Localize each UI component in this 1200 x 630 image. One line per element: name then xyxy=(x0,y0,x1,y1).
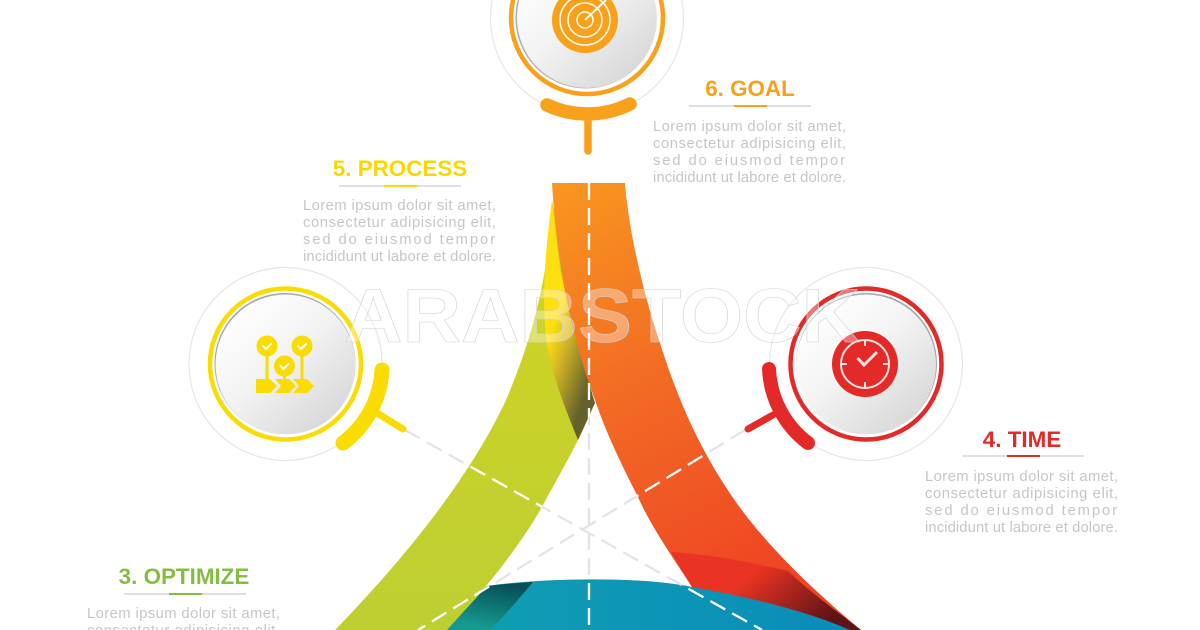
icon: clock xyxy=(832,331,898,397)
body text: process: Lorem ipsum dolor sit amet, xyxy=(303,198,496,214)
text block: 4. time xyxy=(925,427,1118,534)
text block: 6. goal xyxy=(653,76,846,183)
body text: goal: sed do eiusmod tempor xyxy=(653,153,845,169)
icon: target xyxy=(552,0,618,53)
ribbon: orange band xyxy=(552,183,861,630)
ribbon: green band xyxy=(335,200,595,630)
ribbon: teal band xyxy=(447,579,850,630)
text block: 5. process xyxy=(303,156,496,263)
node: process xyxy=(189,268,403,460)
text block: 3. optimize xyxy=(87,564,280,630)
node: time xyxy=(748,268,962,460)
body text: time xyxy=(925,469,1118,534)
body text: goal: consectetur adipisicing elit, xyxy=(653,136,846,152)
pointer: process xyxy=(343,370,403,443)
watermark: ARABSTOCK xyxy=(344,274,860,359)
body text: optimize xyxy=(87,606,280,630)
heading: 3. optimize: 3. OPTIMIZE xyxy=(119,564,249,589)
divider: optimize xyxy=(124,593,246,595)
body text: process xyxy=(303,198,496,263)
dashed guide lines xyxy=(405,183,762,630)
heading: 6. goal: 6. GOAL xyxy=(705,76,795,101)
node: goal xyxy=(490,0,684,151)
heading: 4. time: 4. TIME xyxy=(983,427,1061,452)
divider: goal xyxy=(689,105,811,107)
ribbon fold: red to maroon xyxy=(671,552,861,630)
pointer: goal xyxy=(547,104,630,151)
body text: goal: Lorem ipsum dolor sit amet, xyxy=(653,119,846,135)
ribbon fold: yellow to olive xyxy=(544,200,595,440)
body text: optimize: Lorem ipsum dolor sit amet, xyxy=(87,606,280,622)
body text: process: sed do eiusmod tempor xyxy=(303,232,495,248)
icon: process steps xyxy=(256,336,314,393)
body text: time: consectetur adipisicing elit, xyxy=(925,486,1118,502)
divider: time xyxy=(962,455,1084,457)
body text: time: sed do eiusmod tempor xyxy=(925,503,1117,519)
ribbon fold: dark teal xyxy=(447,582,533,630)
divider: process xyxy=(339,184,461,186)
body text: process: consectetur adipisicing elit, xyxy=(303,215,496,231)
pointer: time xyxy=(748,369,808,443)
heading: 5. process: 5. PROCESS xyxy=(333,156,467,181)
body text: goal xyxy=(653,119,846,183)
body text: time: Lorem ipsum dolor sit amet, xyxy=(925,469,1118,485)
